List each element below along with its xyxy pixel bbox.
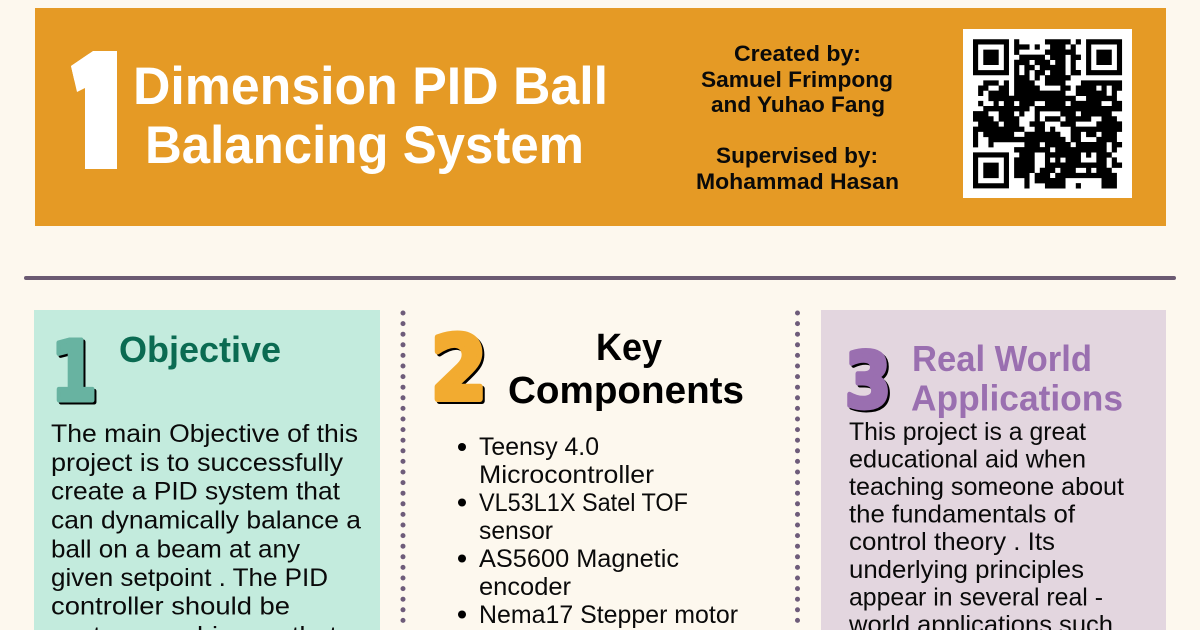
credits: and Yuhao Fang: [711, 92, 885, 117]
credits: Supervised by:: [716, 143, 878, 168]
objective text: project is to successfully: [51, 449, 344, 477]
component list: Nema17 Stepper motor: [479, 601, 738, 629]
component list: sensor: [479, 517, 553, 545]
credits: Mohammad Hasan: [696, 169, 899, 194]
objective text: can dynamically balance a: [51, 506, 361, 534]
title: Balancing System: [145, 116, 584, 175]
applications text: [848, 418, 1124, 630]
credits: [696, 41, 899, 194]
QR code: [963, 29, 1132, 198]
header banner: [35, 8, 1166, 226]
objective text: controller should be: [51, 592, 290, 620]
credits: Samuel Frimpong: [701, 67, 893, 92]
component list: VL53L1X Satel TOF: [479, 489, 688, 517]
numeral 2: 2: [431, 317, 487, 420]
heading: real world applications: Applications: [911, 378, 1123, 418]
big numeral 1: 1: [47, 19, 139, 204]
objective text: ball on a beam at any: [51, 536, 301, 564]
applications text: educational aid when: [849, 446, 1086, 474]
applications text: control theory . Its: [849, 528, 1055, 556]
component list: [458, 433, 738, 629]
dotted divider right: [795, 313, 800, 630]
applications text: the fundamentals of: [849, 500, 1075, 528]
component list: encoder: [479, 573, 571, 601]
dotted divider left: [400, 313, 406, 630]
title: [133, 57, 608, 175]
credits: Created by:: [734, 41, 861, 66]
panel: objective: [34, 310, 380, 630]
component list: Teensy 4.0: [479, 433, 599, 461]
heading: key components: [508, 327, 744, 412]
applications text: appear in several real -: [849, 584, 1103, 612]
component list: AS5600 Magnetic: [479, 545, 679, 573]
applications text: This project is a great: [849, 418, 1086, 446]
component list: Microcontroller: [479, 461, 654, 489]
objective text: create a PID system that: [51, 478, 340, 506]
panel: real world applications: [821, 310, 1166, 630]
objective text: The main Objective of this: [51, 420, 358, 448]
applications text: underlying principles: [849, 556, 1084, 584]
panel: key components: [431, 317, 744, 629]
applications text: teaching someone about: [849, 473, 1124, 501]
objective text: [51, 420, 361, 630]
numeral 3: 3: [845, 336, 891, 425]
heading: key components: Key: [596, 327, 662, 369]
title: Dimension PID Ball: [133, 57, 608, 116]
numeral 1: 1: [51, 325, 97, 420]
heading: real world applications: [911, 338, 1123, 418]
objective text: given setpoint . The PID: [51, 564, 328, 592]
heading: real world applications: Real World: [912, 338, 1092, 379]
heading: objective: Objective: [119, 329, 281, 370]
heading: key components: Components: [508, 370, 744, 412]
